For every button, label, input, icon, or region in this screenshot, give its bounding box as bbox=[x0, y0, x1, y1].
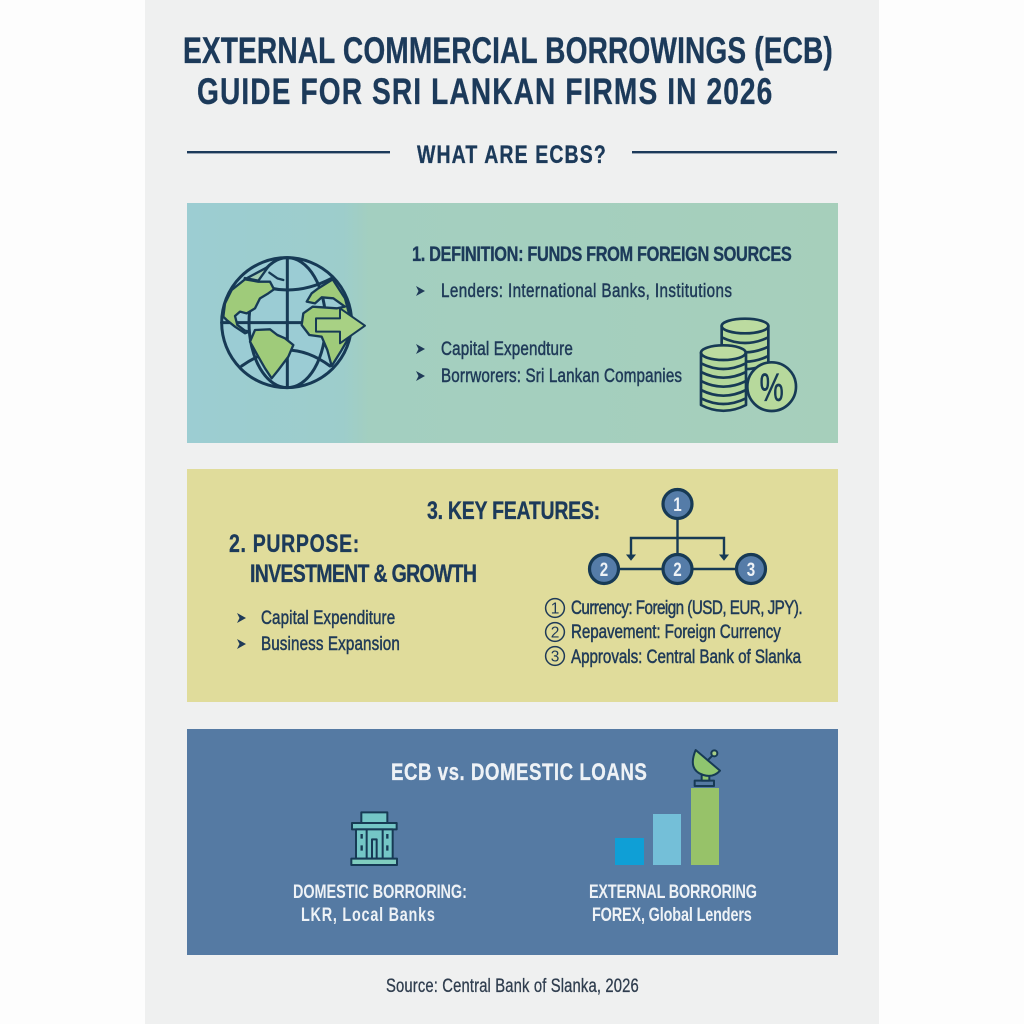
numbered list: key features: Currency: Foreign (USD, EUR, JPY). bbox=[571, 596, 803, 618]
icon: satellite dish bbox=[693, 750, 720, 786]
diagram: feature hierarchy: 2 bbox=[600, 558, 608, 580]
source note: Source: Central Bank of Slanka, 2026 bbox=[386, 975, 639, 996]
bar chart: external growth bbox=[615, 788, 719, 865]
panel: purpose and key features bbox=[187, 469, 838, 702]
title: GUIDE FOR SRI LANKAN FIRMS IN 2026 bbox=[197, 70, 772, 112]
bullet list: purpose: Capital Expenditure bbox=[261, 606, 395, 628]
diagram: feature hierarchy: 3 bbox=[747, 558, 755, 580]
icon: coin stacks with percent bbox=[701, 319, 796, 411]
icon: coin stacks with percent: % bbox=[760, 367, 784, 410]
title bbox=[183, 29, 833, 112]
label: domestic borrowing: LKR, Local Banks bbox=[301, 903, 435, 926]
heading: purpose: 2. PURPOSE: bbox=[229, 530, 359, 558]
numbered list: key features: Repavement: Foreign Currency bbox=[571, 620, 781, 642]
numbered list: key features bbox=[546, 596, 803, 667]
heading: comparison: ECB vs. DOMESTIC LOANS bbox=[391, 759, 647, 786]
heading: purpose: INVESTMENT & GROWTH bbox=[250, 560, 477, 588]
heading: definition: 1. DEFINITION: FUNDS FROM FOREIGN SOURCES bbox=[412, 242, 792, 265]
numbered list: key features: 1 bbox=[551, 600, 559, 618]
bullet list: lenders and borrowers bbox=[416, 279, 732, 386]
bullet list: lenders and borrowers: Capital Expendture bbox=[441, 337, 573, 359]
heading: purpose bbox=[229, 530, 477, 588]
label: domestic borrowing bbox=[293, 880, 467, 926]
bullet list: purpose bbox=[237, 606, 400, 654]
panel: ECB vs domestic loans bbox=[187, 729, 838, 955]
icon: bank building bbox=[351, 812, 397, 865]
page sheet bbox=[145, 0, 879, 1024]
heading: key features: 3. KEY FEATURES: bbox=[427, 497, 600, 525]
numbered list: key features: 3 bbox=[551, 648, 559, 666]
panel: definition bbox=[187, 203, 838, 443]
diagram: feature hierarchy: 1 bbox=[673, 493, 682, 515]
numbered list: key features: 2 bbox=[551, 624, 559, 642]
label: domestic borrowing: DOMESTIC BORRORING: bbox=[293, 880, 467, 903]
title: EXTERNAL COMMERCIAL BORROWINGS (ECB) bbox=[183, 29, 833, 71]
bullet list: lenders and borrowers: Lenders: International Banks, Institutions bbox=[441, 279, 732, 301]
bullet list: lenders and borrowers: Borrworers: Sri Lankan Companies bbox=[441, 364, 682, 386]
label: external borrowing bbox=[589, 880, 757, 926]
section heading: what are ECBs: WHAT ARE ECBS? bbox=[417, 141, 606, 169]
diagram: feature hierarchy: 2 bbox=[673, 558, 682, 580]
icon: globe with arrow bbox=[222, 258, 365, 388]
numbered list: key features: Approvals: Central Bank of Slanka bbox=[571, 645, 801, 667]
label: external borrowing: EXTERNAL BORRORING bbox=[589, 880, 757, 903]
diagram: feature hierarchy bbox=[590, 490, 766, 584]
label: external borrowing: FOREX, Global Lenders bbox=[592, 903, 752, 926]
bullet list: purpose: Business Expansion bbox=[261, 632, 400, 654]
